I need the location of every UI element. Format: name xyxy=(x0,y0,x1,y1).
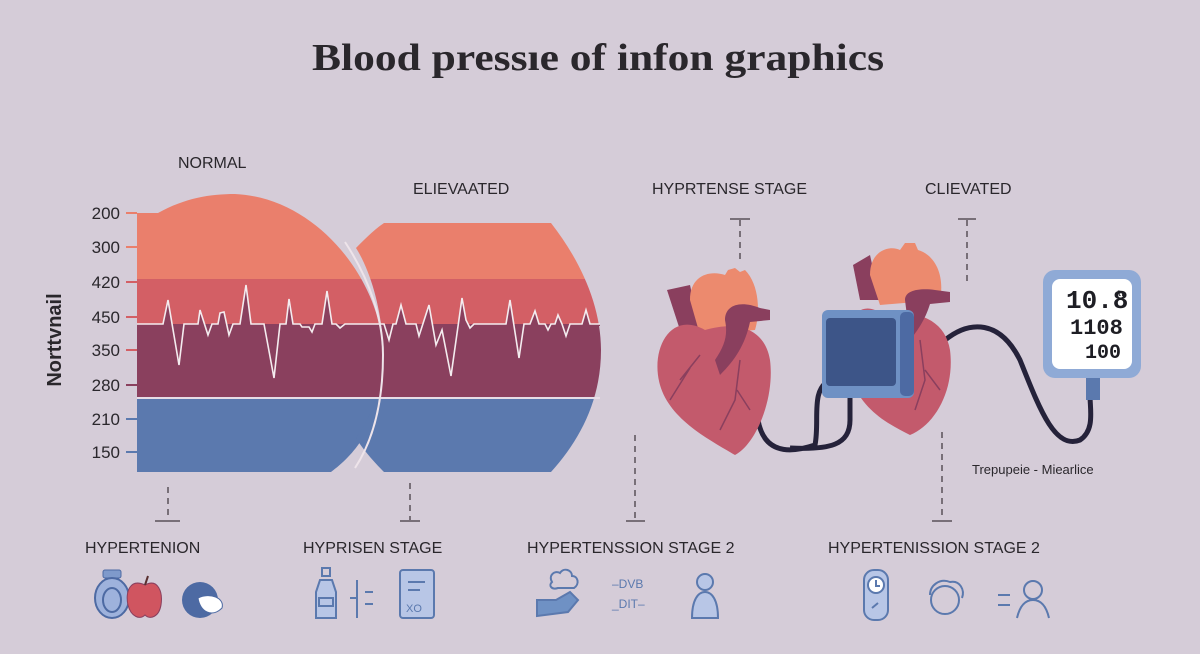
chart: blood pressure bands xyxy=(130,185,610,479)
icons group 3: –DVB xyxy=(612,577,643,591)
icons group 3: _DIT– xyxy=(611,597,645,611)
stage labels top: ELIEVAATED xyxy=(413,181,509,198)
monitor: 1108 xyxy=(1070,316,1123,341)
bottom labels: HYPRISEN STAGE xyxy=(303,540,442,557)
stage labels top: HYPRTENSE STAGE xyxy=(652,181,807,198)
bottom labels: HYPERTENISSION STAGE 2 xyxy=(828,540,1040,557)
ECG line xyxy=(137,285,600,378)
heart 1 xyxy=(657,268,771,455)
title: Blood pressıe of infon graphics xyxy=(312,37,884,79)
y axis labels: 300 xyxy=(92,238,120,257)
y axis labels: 280 xyxy=(92,376,120,395)
stage labels top: CLIEVATED xyxy=(925,181,1012,198)
monitor: lr xyxy=(1117,291,1125,299)
icons group 3 xyxy=(537,570,718,618)
y axis labels xyxy=(92,204,137,462)
monitor: 10.8 xyxy=(1066,286,1128,316)
dashed guide lines xyxy=(168,220,967,520)
heart 2 xyxy=(846,243,951,435)
bottom labels: HYPERTENSSION STAGE 2 xyxy=(527,540,735,557)
caption: Trepupeie - Miearlice xyxy=(972,462,1094,477)
icons group 2: XO xyxy=(406,603,422,615)
icons group 2 xyxy=(316,568,434,618)
monitor xyxy=(1043,270,1141,400)
y axis title: Norttvnail xyxy=(44,293,66,387)
stage labels top xyxy=(178,155,1012,198)
bottom labels: HYPERTENION xyxy=(85,540,200,557)
cuff xyxy=(822,310,914,398)
y axis labels: 150 xyxy=(92,443,120,462)
icons group 4 xyxy=(864,570,1049,620)
icons group 1 xyxy=(95,570,222,618)
y axis labels: 350 xyxy=(92,341,120,360)
y axis labels: 210 xyxy=(92,410,120,429)
bottom labels xyxy=(85,540,1040,557)
stage labels top: NORMAL xyxy=(178,155,247,172)
y axis labels: 420 xyxy=(92,273,120,292)
y axis labels: 200 xyxy=(92,204,120,223)
monitor: 100 xyxy=(1085,342,1121,365)
y axis labels: 450 xyxy=(92,308,120,327)
cable xyxy=(758,327,1091,450)
